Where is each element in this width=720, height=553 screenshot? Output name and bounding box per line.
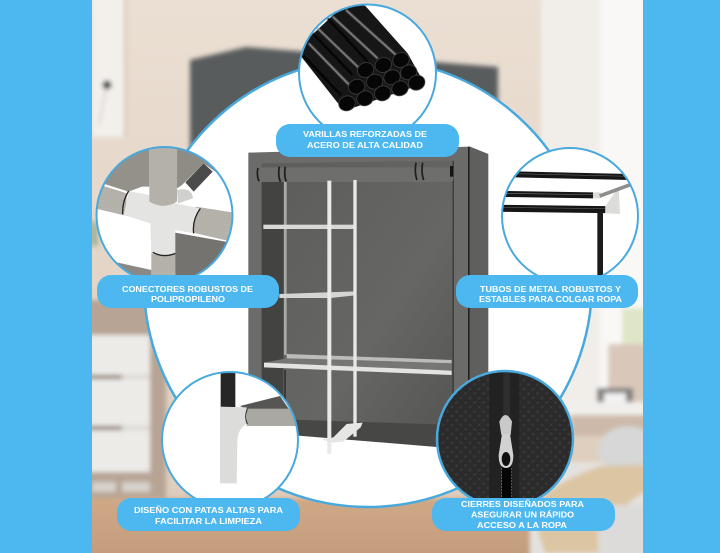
connector body [124, 191, 200, 256]
icon: wall poster [92, 0, 127, 137]
label: tall legs [117, 498, 300, 531]
callout: tall leg photo [162, 370, 298, 508]
rod ends [337, 50, 427, 113]
hanging rods [501, 174, 630, 210]
label: steel rods [276, 124, 459, 157]
upright and shelf edge [221, 370, 235, 407]
lower tube [151, 252, 176, 275]
white gap and dark rod [194, 172, 225, 206]
label: tall legs: DISEÑO CON PATAS ALTAS PARA [134, 505, 283, 515]
label: metal tubes [456, 275, 638, 308]
label: metal tubes: TUBOS DE METAL ROBUSTOS Y [480, 284, 621, 294]
callout: metal hanging tubes photo [501, 148, 638, 284]
horizontal tubes [98, 186, 127, 216]
plant [90, 222, 98, 246]
black upright [597, 212, 603, 278]
foot bracket [322, 423, 363, 443]
dresser [88, 300, 166, 500]
bed with blanket [530, 426, 658, 553]
wardrobe interior [262, 161, 453, 448]
top roller [257, 163, 453, 182]
side table [572, 388, 648, 436]
white area under the wardrobe [248, 435, 470, 460]
zipper band [489, 370, 519, 503]
upper background tube area [105, 150, 150, 192]
shelves [263, 225, 452, 375]
vertical tube [149, 145, 177, 206]
wardrobe front frame [248, 147, 470, 450]
label: zippers: CIERRES DISEÑADOS PARA [461, 499, 584, 509]
blurred grey wardrobe [190, 47, 498, 300]
label: zippers [432, 498, 615, 531]
curtain and window light [541, 0, 650, 415]
right blue side bar [643, 0, 720, 553]
wardrobe side panel [470, 147, 488, 407]
label: steel rods: VARILLAS REFORZADAS DE [303, 129, 427, 139]
white bracket [593, 186, 620, 214]
label: steel rods: ACERO DE ALTA CALIDAD [307, 140, 423, 150]
back poles [284, 182, 287, 427]
panel: blurred room background [88, 0, 658, 553]
rod highlights [303, 10, 396, 95]
panel: central white circle [144, 59, 592, 507]
label: tall legs: FACILITAR LA LIMPIEZA [155, 516, 262, 526]
callout: zipper photo [437, 370, 573, 507]
callout: polypropylene connector photo [96, 146, 234, 275]
rod bundle body [302, 6, 420, 108]
label: connectors: POLIPROPILENO [151, 294, 225, 304]
left blue side bar [0, 0, 92, 553]
label: zippers: ACCESO A LA ROPA [477, 520, 567, 530]
rods [302, 6, 426, 112]
product: fabric wardrobe [248, 147, 488, 460]
label: connectors [97, 275, 279, 308]
wooden floor [88, 498, 648, 553]
front poles [327, 180, 357, 454]
label: connectors: CONECTORES ROBUSTOS DE [122, 284, 253, 294]
label: zippers: ASEGURAR UN RÁPIDO [471, 510, 574, 520]
white leg connector [220, 407, 247, 483]
silver zipper slider [499, 415, 512, 435]
horizontal gray tube [247, 409, 298, 426]
label: metal tubes: ESTABLES PARA COLGAR ROPA [479, 294, 622, 304]
dark lower area [175, 232, 226, 275]
callout: steel rods photo [298, 4, 437, 124]
